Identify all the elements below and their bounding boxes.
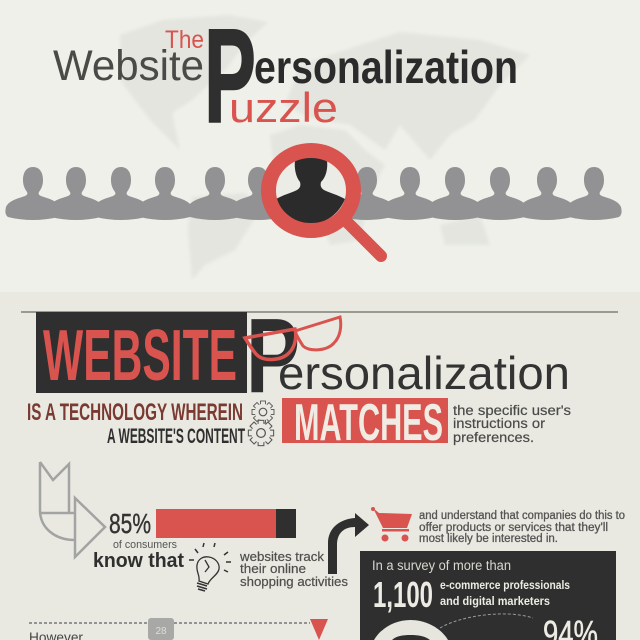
matches description: instructions or	[453, 416, 546, 431]
matches badge	[282, 394, 448, 452]
survey panel: and digital marketers	[440, 594, 550, 608]
website block: WEBSITE	[43, 316, 237, 396]
matches badge: MATCHES	[294, 394, 443, 452]
survey panel: 1,100	[373, 574, 433, 615]
icon: red glasses	[245, 317, 341, 360]
however row	[29, 618, 328, 640]
85 percent stat: know that	[93, 550, 184, 572]
survey panel: e-commerce professionals	[440, 578, 570, 592]
hero panel background	[0, 0, 640, 292]
definition text: IS A TECHNOLOGY WHEREIN	[27, 399, 243, 426]
definition text	[27, 399, 245, 448]
title: The	[165, 26, 204, 54]
icon: gears	[248, 401, 274, 446]
tracking text	[239, 550, 348, 589]
icon: shopping cart	[371, 507, 412, 542]
title: Website	[53, 42, 204, 90]
matches description	[453, 403, 571, 445]
icon: curved arrow	[328, 513, 369, 574]
matches description: the specific user's	[453, 403, 571, 418]
personalization heading	[246, 297, 570, 415]
tracking text: shopping activities	[240, 575, 348, 589]
tracking text: websites track	[239, 550, 325, 564]
85 percent stat: of consumers	[113, 539, 177, 551]
tracking text: their online	[240, 562, 306, 576]
magnifying glass with highlighted person	[268, 150, 381, 256]
companies text: most likely be interested in.	[419, 533, 558, 545]
world map	[120, 15, 530, 280]
crowd of grey silhouettes	[5, 167, 622, 220]
however row: 28	[155, 626, 167, 637]
85 percent stat: 85%	[109, 508, 151, 539]
icon: light bulb	[189, 543, 231, 591]
companies text: offer products or services that they'll	[419, 522, 608, 534]
title: P	[204, 2, 256, 151]
85 percent stat	[93, 508, 296, 572]
website block	[36, 312, 247, 396]
survey panel: In a survey of more than	[372, 558, 511, 573]
title: uzzle	[229, 84, 338, 131]
companies text	[419, 510, 625, 545]
icon: outline arrow	[40, 462, 105, 557]
title: ersonalization	[254, 41, 518, 93]
title	[53, 2, 518, 151]
companies text: and understand that companies do this to	[419, 510, 625, 522]
survey panel	[360, 551, 616, 640]
definition text: A WEBSITE'S CONTENT	[107, 425, 245, 448]
divider	[21, 311, 618, 313]
personalization heading: ersonalization	[278, 347, 570, 399]
matches description: preferences.	[453, 430, 534, 445]
personalization heading: P	[246, 297, 300, 415]
